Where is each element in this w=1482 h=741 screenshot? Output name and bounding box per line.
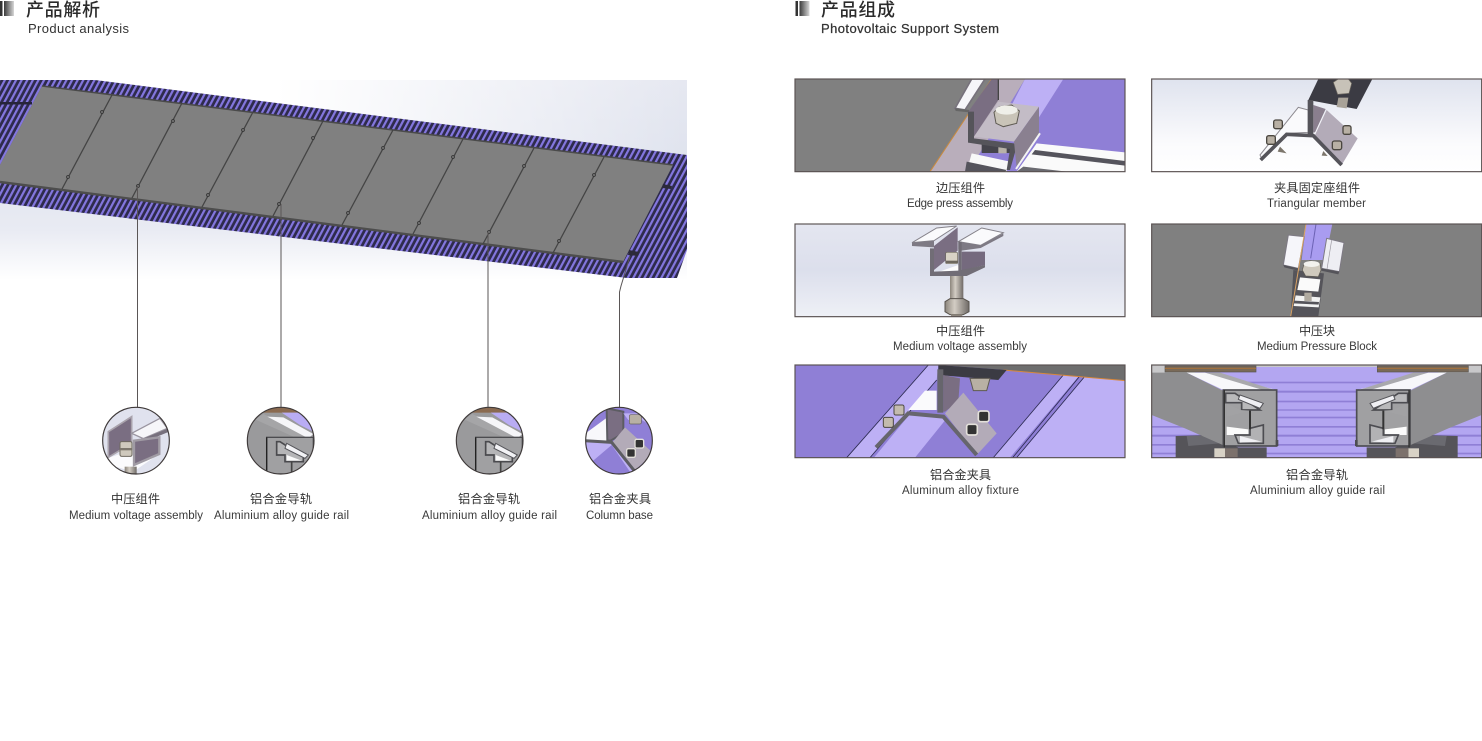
label: 中压组件: 中压组件	[111, 491, 160, 506]
label: 中压组件	[69, 491, 203, 522]
heading: 产品组成: 产品组成	[821, 0, 895, 20]
detail: aluminium guide rail circle 2	[454, 405, 526, 477]
label: 铝合金导轨: Aluminium alloy guide rail	[214, 510, 349, 522]
label: 中压组件 right	[893, 323, 1027, 353]
label: 铝合金导轨 second	[422, 491, 557, 522]
label: 铝合金导轨	[214, 491, 349, 522]
label: 中压块	[1257, 323, 1377, 353]
label: 铝合金导轨 right	[1250, 467, 1385, 497]
label: 夹具固定座组件: Triangular member	[1267, 198, 1366, 210]
label: 中压块: 中压块	[1299, 323, 1335, 338]
label: 中压块: Medium Pressure Block	[1257, 341, 1377, 353]
left rail assembly	[1152, 366, 1278, 458]
solar panels	[0, 86, 673, 262]
icon: header bar right	[796, 1, 810, 16]
label: 边压组件: Edge press assembly	[907, 198, 1013, 210]
label: 铝合金夹具: Column base	[586, 510, 653, 522]
mounting rail stub	[0, 102, 32, 104]
panel: medium pressure block	[1152, 224, 1482, 317]
label: 铝合金夹具	[586, 491, 653, 522]
label: 中压组件 right: Medium voltage assembly	[893, 341, 1027, 353]
subheading: Product analysis: Product analysis	[28, 21, 130, 36]
label: 边压组件: 边压组件	[936, 181, 985, 195]
label: 夹具固定座组件	[1267, 180, 1366, 210]
render background	[0, 80, 687, 280]
header: product composition	[796, 0, 999, 36]
label: 边压组件	[907, 181, 1013, 210]
panel: solar array render	[0, 80, 687, 408]
label: 铝合金导轨: 铝合金导轨	[250, 491, 312, 506]
leader lines	[138, 186, 630, 408]
label: 铝合金夹具 right: 铝合金夹具	[930, 467, 991, 482]
header: product analysis	[0, 0, 130, 36]
right rail assembly (mirror)	[1355, 366, 1482, 458]
detail: aluminium guide rail circle	[245, 405, 317, 477]
icon: header bar left	[0, 1, 14, 16]
panel: edge press assembly	[795, 79, 1125, 172]
label: 铝合金导轨 right: 铝合金导轨	[1286, 467, 1348, 482]
panel: triangular member	[1152, 79, 1482, 172]
label: 夹具固定座组件: 夹具固定座组件	[1274, 180, 1360, 195]
panel: aluminum alloy fixture	[795, 365, 1125, 458]
label: 铝合金夹具 right	[902, 467, 1019, 497]
label: 铝合金导轨 second: 铝合金导轨	[458, 491, 520, 506]
detail: medium voltage assembly circle	[102, 406, 170, 475]
panel: aluminium alloy guide rail	[1152, 365, 1482, 458]
label: 铝合金夹具: 铝合金夹具	[589, 491, 651, 506]
label: 中压组件 right: 中压组件	[936, 323, 985, 338]
label: 铝合金导轨 right: Aluminium alloy guide rail	[1250, 485, 1385, 497]
subheading: Photovoltaic Support System: Photovoltaic Support System	[821, 21, 999, 36]
label: 铝合金夹具 right: Aluminum alloy fixture	[902, 485, 1019, 497]
panel: medium voltage assembly	[795, 224, 1125, 317]
heading: 产品解析: 产品解析	[26, 0, 100, 20]
label: 铝合金导轨 second: Aluminium alloy guide rail	[422, 510, 557, 522]
corrugated purple roof	[0, 80, 687, 278]
detail: aluminium alloy fixture circle	[583, 405, 655, 477]
label: 中压组件: Medium voltage assembly	[69, 510, 203, 522]
